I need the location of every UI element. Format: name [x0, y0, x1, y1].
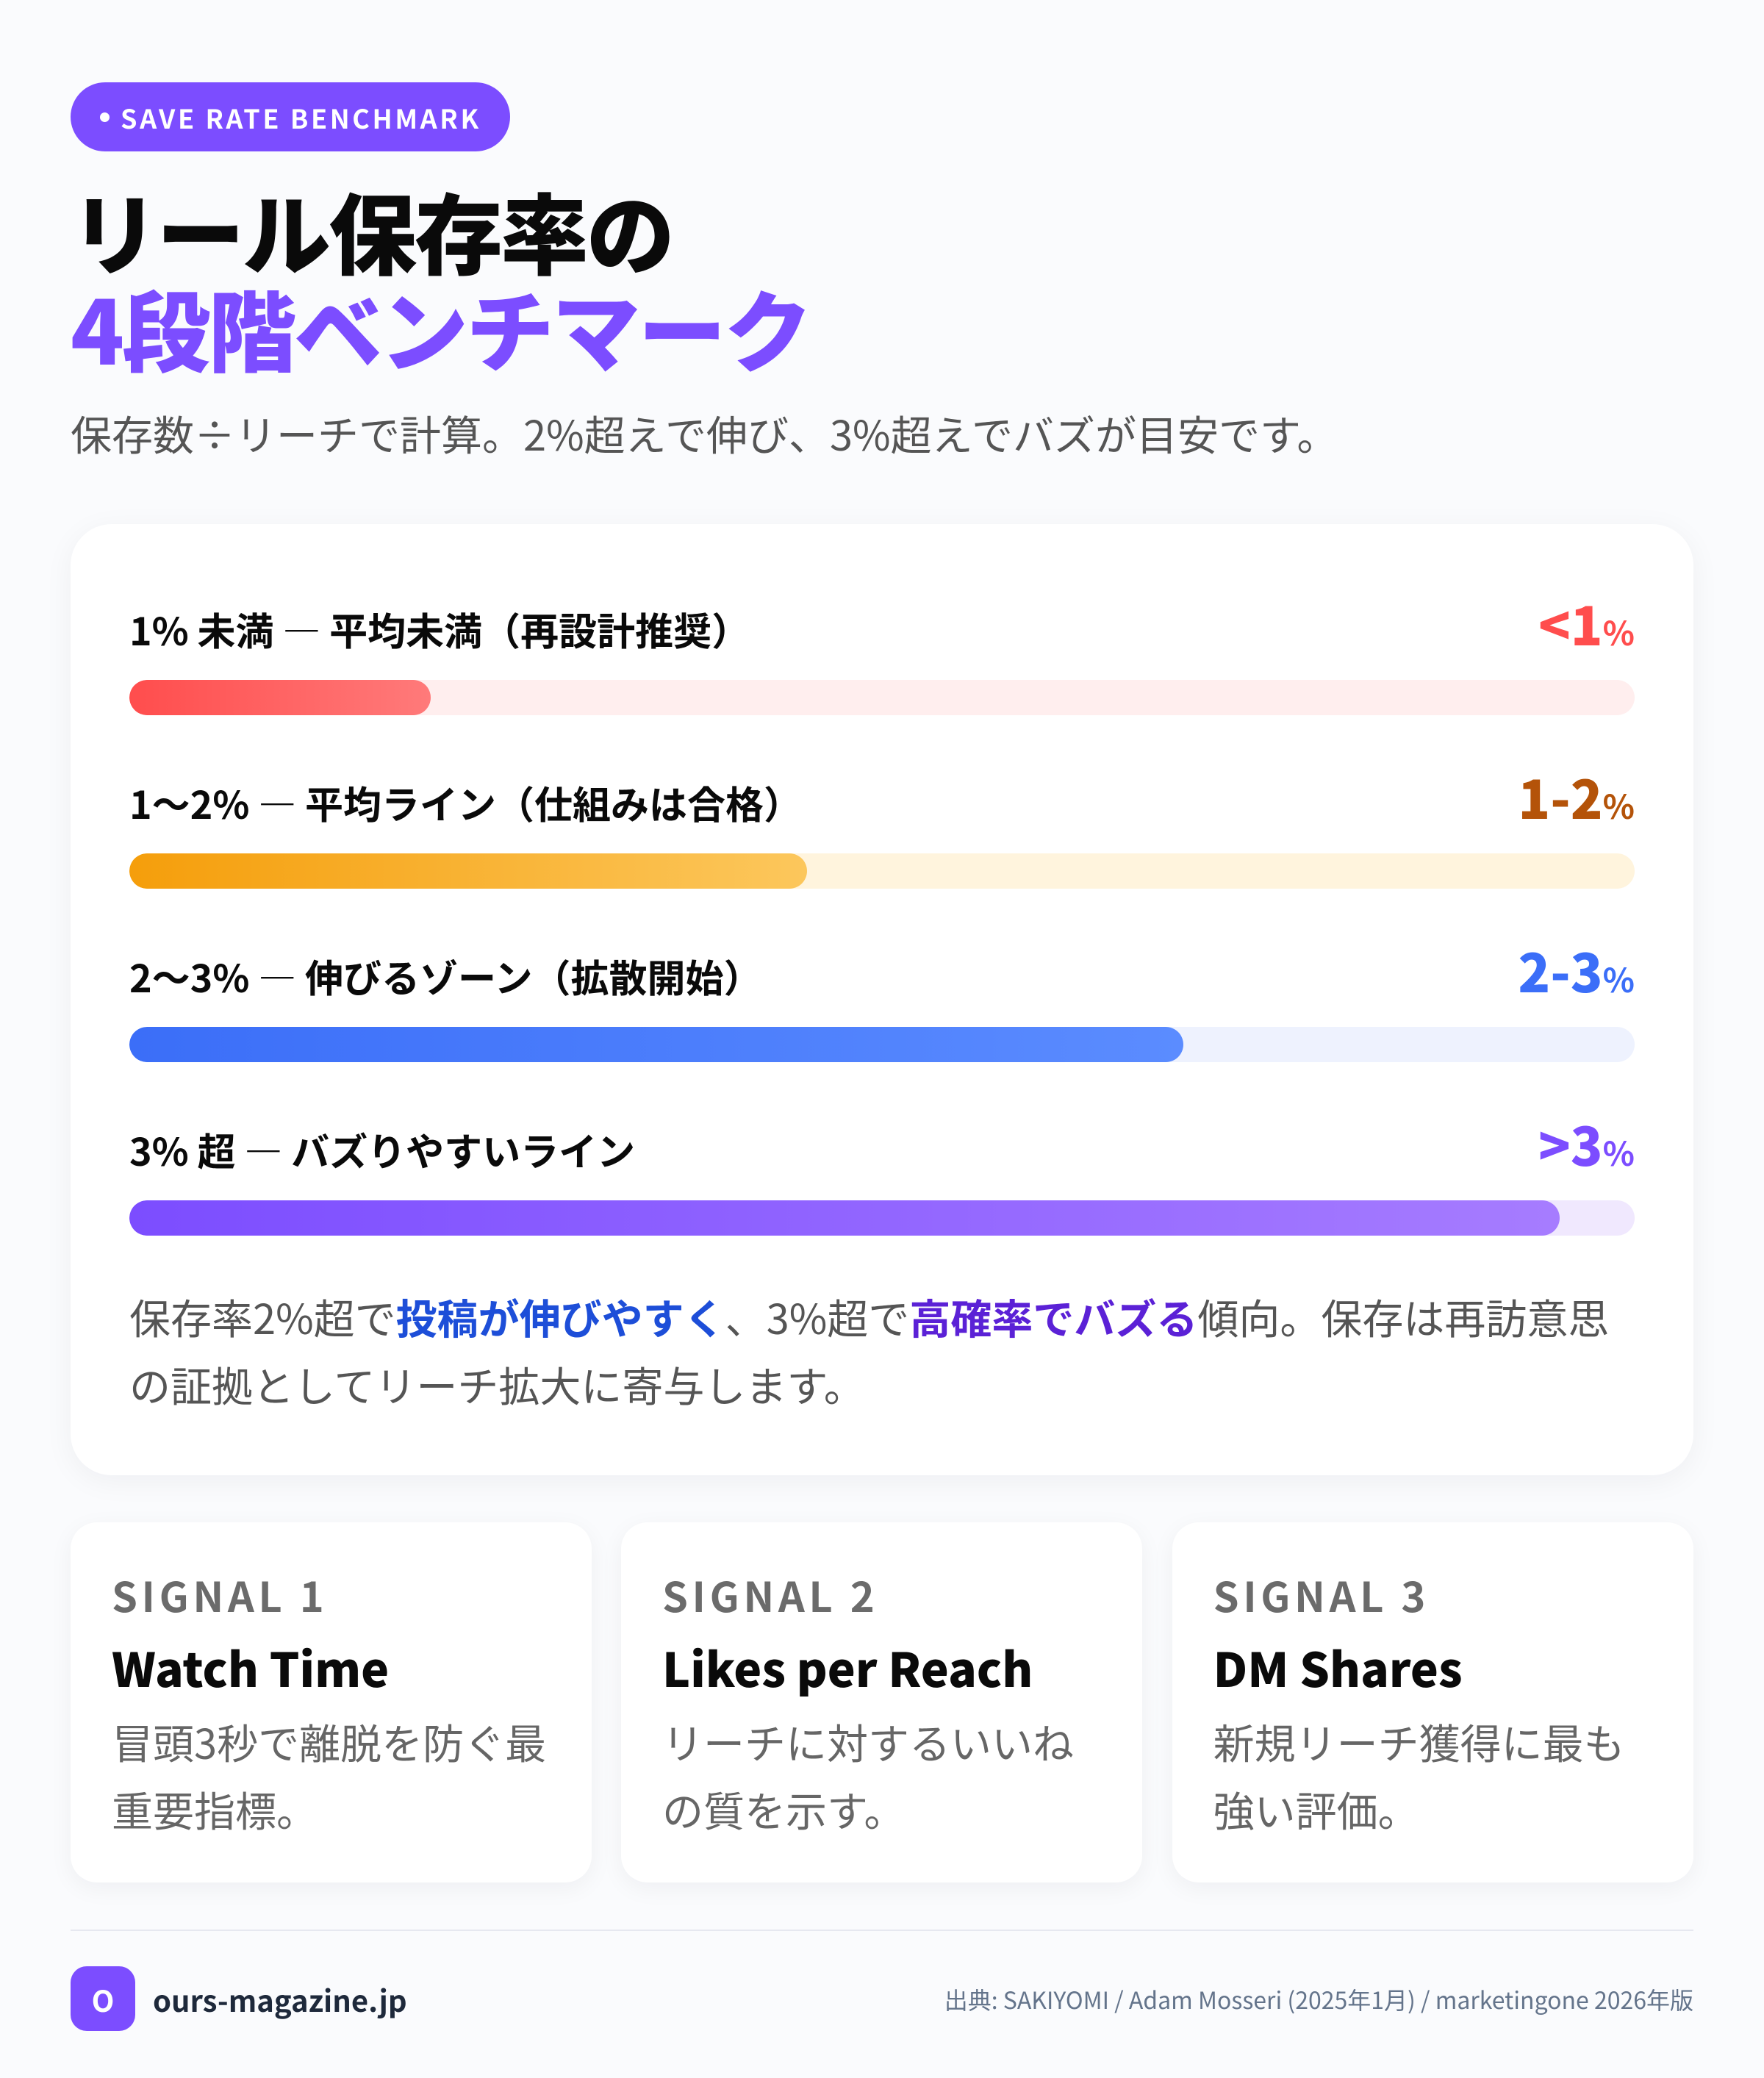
- title: 4段階ベンチマーク: [71, 262, 810, 390]
- panel: benchmark tiers: [71, 524, 1693, 1475]
- title: [71, 165, 810, 390]
- tier 2 label: 1〜2% — 平均ライン（仕組みは合格）: [129, 775, 802, 830]
- logo icon: O: [92, 1978, 114, 2021]
- note text: 保存率2%超で投稿が伸びやすく、3%超で高確率でバズる傾向。保存は再訪意思の証拠としてリーチ拡大に寄与します。: [129, 1287, 1609, 1414]
- tier 2 value: 1-2%: [1518, 757, 1635, 834]
- signal 3 description: 新規リーチ獲得に最も強い評価。: [1213, 1712, 1625, 1839]
- site name: ours-magazine.jp: [153, 1978, 407, 2021]
- badge text: SAVE RATE BENCHMARK: [121, 98, 481, 137]
- tier 3 label: 2〜3% — 伸びるゾーン（拡散開始）: [129, 948, 761, 1003]
- signal 2 description: リーチに対するいいねの質を示す。: [662, 1712, 1074, 1839]
- signal 1 tag: SIGNAL 1: [112, 1565, 328, 1624]
- signal 3 name: DM Shares: [1213, 1633, 1463, 1701]
- signal 1 description: 冒頭3秒で離脱を防ぐ最重要指標。: [112, 1712, 546, 1839]
- signal 3 tag: SIGNAL 3: [1213, 1565, 1430, 1624]
- signal 2 name: Likes per Reach: [662, 1633, 1033, 1701]
- tier 4 value: >3%: [1538, 1104, 1635, 1181]
- tier 3 bar: [129, 1027, 1635, 1062]
- tier 4 bar: [129, 1200, 1635, 1236]
- tier 2 bar: [129, 853, 1635, 889]
- badge bullet: [100, 112, 110, 122]
- tier 1 label: 1% 未満 — 平均未満（再設計推奨）: [129, 601, 750, 656]
- logo icon: [71, 1966, 135, 2031]
- source credit: 出典: SAKIYOMI / Adam Mosseri (2025年1月) / marketingone 2026年版: [944, 1982, 1693, 2016]
- panel: signal 3: [1172, 1522, 1693, 1882]
- signal 2 tag: SIGNAL 2: [662, 1565, 878, 1624]
- signal 1 name: Watch Time: [112, 1633, 389, 1701]
- panel: signal 2: [621, 1522, 1142, 1882]
- panel: signal 1: [71, 1522, 592, 1882]
- title: リール保存率の: [71, 165, 673, 293]
- tier 1 bar: [129, 680, 1635, 715]
- tier 1 value: <1%: [1538, 584, 1635, 661]
- tier 3 value: 2-3%: [1518, 931, 1635, 1008]
- subtitle: 保存数÷リーチで計算。2%超えで伸び、3%超えでバズが目安です。: [71, 404, 1338, 463]
- badge: save rate benchmark: [71, 82, 510, 151]
- tier 4 label: 3% 超 — バズりやすいライン: [129, 1122, 635, 1177]
